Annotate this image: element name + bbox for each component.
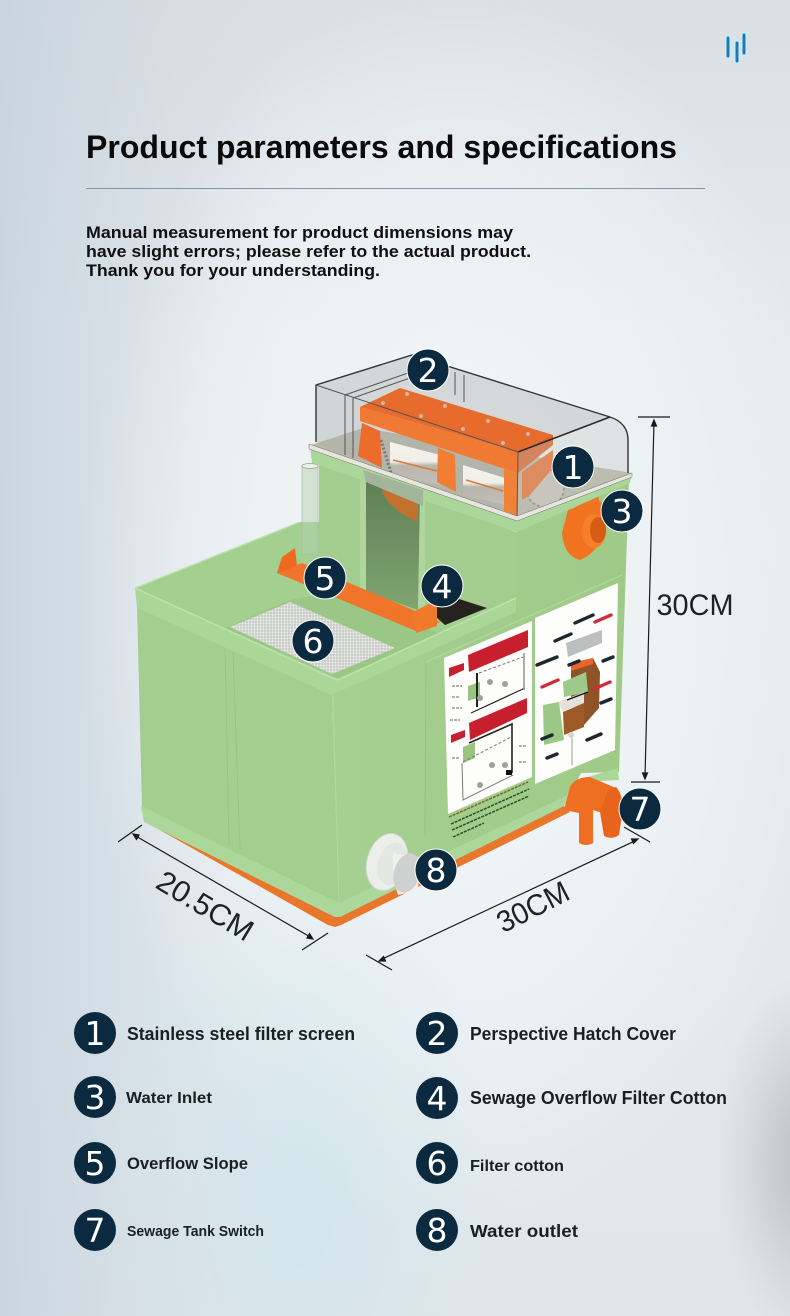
left sticker (444, 621, 532, 814)
orange overflow slope (277, 548, 440, 633)
legend item 6: 6 (426, 1144, 448, 1183)
depth dimension: 20.5CM (118, 825, 328, 950)
white water outlet (360, 829, 425, 896)
callout 6 (292, 620, 334, 662)
callout 4 (421, 565, 463, 607)
legend (74, 1012, 727, 1251)
legend item 3 (74, 1076, 212, 1118)
legend item 2: 2 (426, 1014, 448, 1053)
callout 7 (619, 788, 661, 830)
stainless steel rim (309, 444, 632, 521)
orange water inlet (562, 489, 606, 560)
legend item 3: Water Inlet (126, 1090, 212, 1107)
legend item 4: Sewage Overflow Filter Cotton (470, 1088, 727, 1108)
label: height: 30CM (656, 589, 734, 622)
callout 6: 6 (302, 622, 324, 661)
orange sewage tap (564, 777, 622, 845)
right sticker (535, 583, 618, 784)
callout 7: 7 (630, 790, 650, 829)
hatch cover right end and outlines (316, 355, 628, 518)
drum seen through window (381, 486, 418, 522)
chamber inspection window (366, 478, 420, 610)
callout 1: 1 (562, 448, 584, 487)
legend item 6 (416, 1142, 564, 1184)
legend item 8: Water outlet (470, 1221, 578, 1241)
tank base band (141, 806, 340, 917)
callout 1 (552, 446, 594, 488)
title: Product parameters and specifications (86, 129, 677, 165)
legend item 5 (74, 1142, 248, 1184)
right rim band (332, 598, 516, 695)
legend item 1 (74, 1012, 355, 1054)
legend item 1: Stainless steel filter screen (127, 1024, 355, 1044)
chamber top band (310, 447, 632, 532)
callout 8 (415, 849, 457, 891)
window recess on top band (363, 470, 423, 506)
icon: brand bars (728, 35, 744, 61)
label: depth: 20.5CM (150, 865, 259, 948)
right face of unit (332, 480, 629, 917)
width dimension: 30CM (366, 827, 650, 970)
note text block: Manual measurement for product dimensions may (86, 223, 514, 242)
tank corner and panel ribs (225, 575, 622, 905)
upper chamber front face (319, 455, 516, 625)
callout 5 (304, 557, 346, 599)
note text block: have slight errors; please refer to the actual product. (86, 242, 531, 261)
callout 8: 8 (426, 851, 446, 890)
legend item 7: 7 (84, 1211, 106, 1250)
small green warning text strip (449, 782, 529, 837)
legend item 8 (416, 1209, 578, 1251)
product illustration: filter box (135, 355, 632, 927)
stainless steel filter drum (381, 440, 564, 507)
filter cotton (230, 602, 395, 674)
legend item 8: 8 (426, 1211, 448, 1250)
callout 4: 4 (432, 567, 452, 606)
legend item 4: 4 (426, 1079, 448, 1118)
legend item 6: Filter cotton (470, 1158, 564, 1175)
legend item 4 (416, 1077, 727, 1119)
tank rim band (135, 588, 338, 695)
orange base plate (144, 806, 570, 927)
legend item 2 (416, 1012, 676, 1054)
mechanism tray (311, 428, 632, 516)
callout 2 (407, 349, 449, 391)
transparent hatch cover top and faces (316, 355, 610, 518)
legend item 1: 1 (84, 1014, 106, 1053)
note text block (86, 223, 531, 280)
right base band (339, 768, 619, 917)
window pillars (360, 475, 425, 610)
callout markers on product (292, 349, 661, 891)
label: width: 30CM (491, 875, 575, 940)
callout 3: 3 (612, 492, 632, 531)
legend item 7 (74, 1209, 264, 1251)
tank interior (135, 522, 516, 680)
legend item 5: Overflow Slope (127, 1154, 248, 1173)
height dimension: 30CM (631, 417, 670, 782)
overflow tube (302, 464, 318, 554)
left face of tank (137, 606, 339, 905)
legend item 7: Sewage Tank Switch (127, 1224, 264, 1240)
callout 2: 2 (418, 351, 438, 390)
legend item 5: 5 (84, 1144, 106, 1183)
orange filter housing (358, 388, 553, 516)
sponge: sewage overflow filter cotton (425, 598, 487, 625)
legend item 3: 3 (84, 1078, 106, 1117)
callout 5: 5 (314, 559, 336, 598)
legend item 2: Perspective Hatch Cover (470, 1024, 676, 1044)
rim highlight (135, 522, 516, 680)
interior shaded floor (225, 590, 440, 678)
note text block: Thank you for your understanding. (86, 261, 380, 280)
callout 3 (601, 490, 643, 532)
